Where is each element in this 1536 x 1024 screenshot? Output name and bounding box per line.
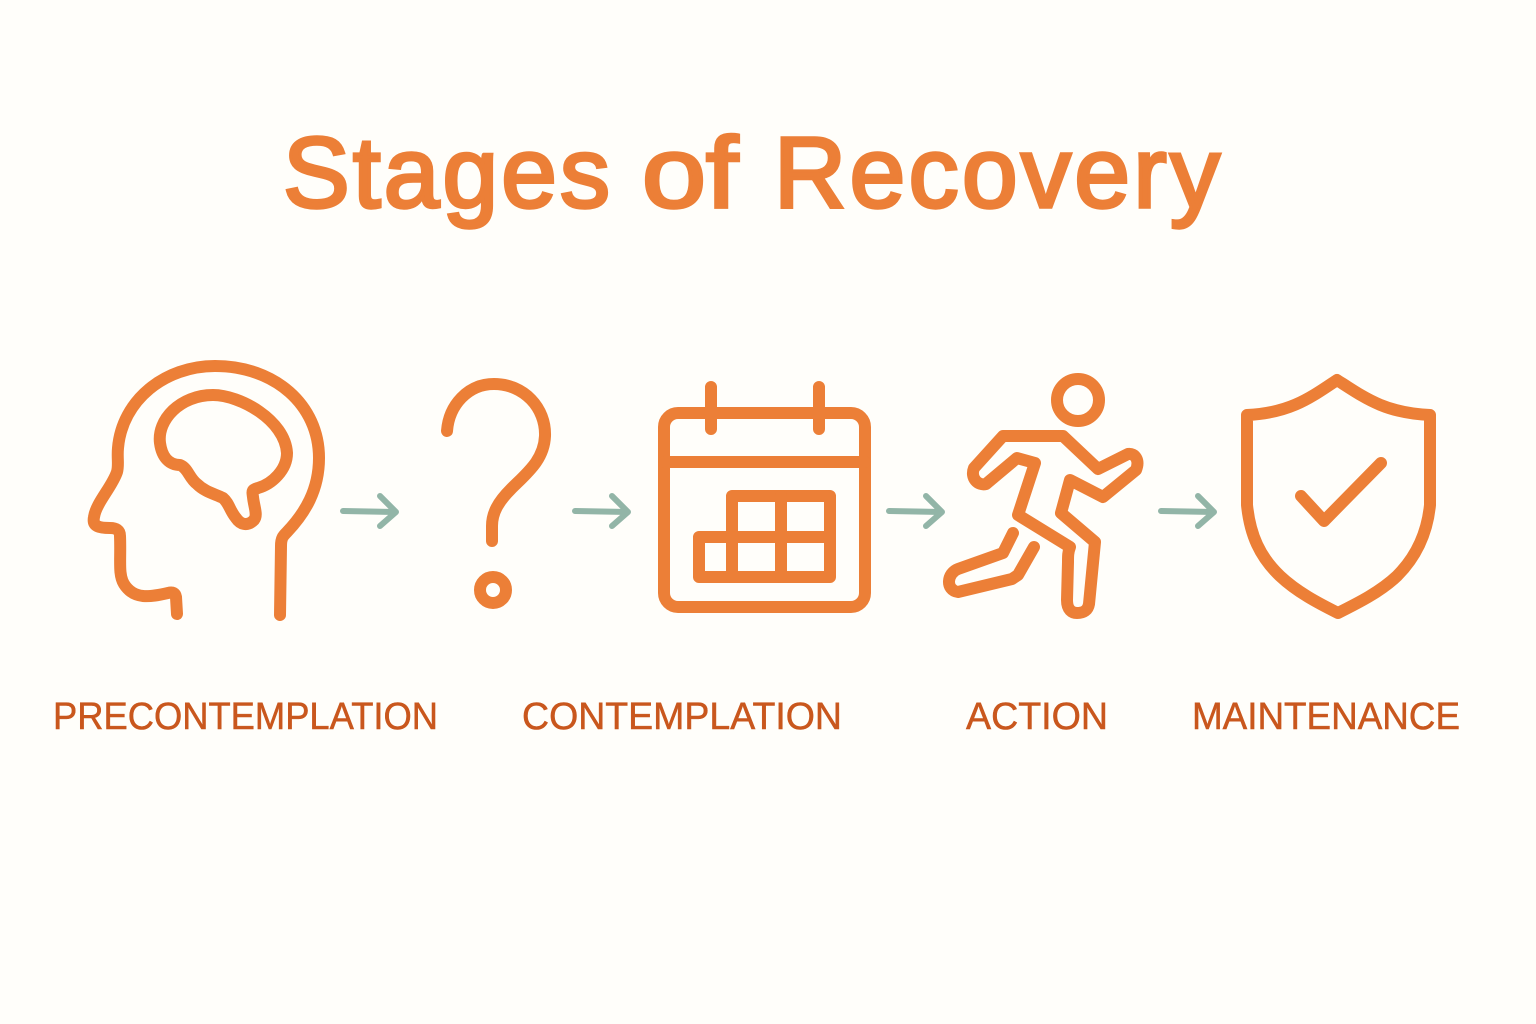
- title: Recovery: [774, 117, 1220, 229]
- title: [283, 117, 1220, 229]
- arrow 2: [575, 496, 628, 526]
- icon: calendar: [664, 387, 865, 607]
- title: Stages: [283, 117, 610, 229]
- label: contemplation: CONTEMPLATION: [522, 696, 842, 738]
- arrow 4: [1161, 496, 1214, 526]
- title: of: [642, 117, 738, 229]
- arrow 3: [889, 496, 942, 526]
- arrow 1: [343, 496, 396, 526]
- label: precontemplation: PRECONTEMPLATION: [53, 696, 438, 738]
- icon: question mark: [447, 384, 545, 603]
- icon: shield with check: [1247, 380, 1430, 613]
- icon: head with brain: [94, 366, 319, 615]
- icon: running figure: [949, 379, 1137, 613]
- label: action: ACTION: [966, 696, 1108, 738]
- label: maintenance: MAINTENANCE: [1192, 696, 1460, 738]
